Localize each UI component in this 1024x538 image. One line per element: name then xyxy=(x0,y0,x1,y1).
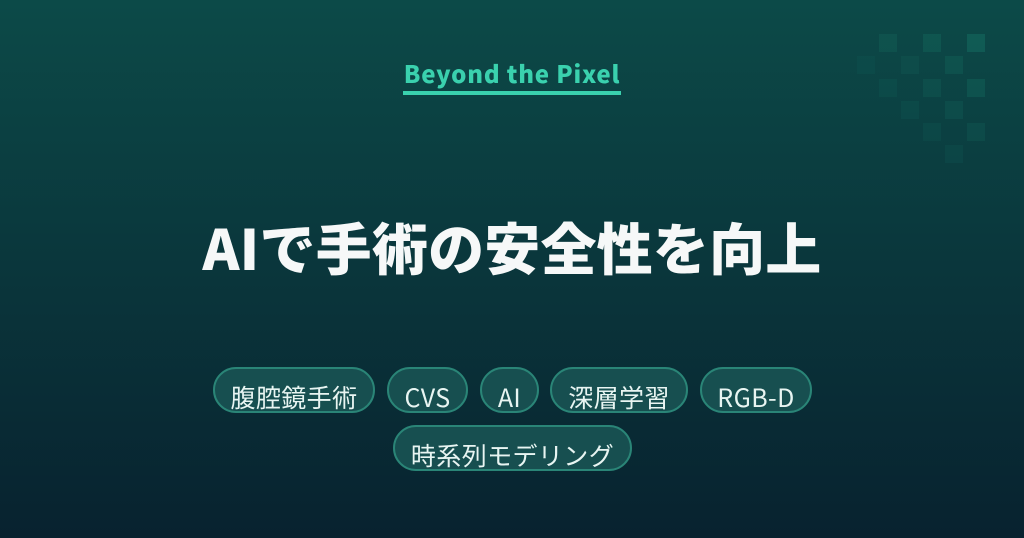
keyword tags xyxy=(213,367,812,472)
tag: AI xyxy=(480,367,539,413)
tag: deep learning xyxy=(550,367,688,413)
brand heading: Beyond the Pixel: Beyond the Pixel xyxy=(404,55,620,90)
tag: RGB-D xyxy=(700,367,812,413)
tag: AI: AI xyxy=(498,378,521,414)
tag: RGB-D: RGB-D xyxy=(717,378,795,414)
tag: laparoscopic surgery xyxy=(213,367,375,413)
tag: deep learning: 深層学習 xyxy=(568,378,670,414)
title: AIで手術の安全性を向上 xyxy=(203,206,821,287)
decorative pixel pattern xyxy=(879,34,985,141)
tag: time-series modeling: 時系列モデリング xyxy=(411,436,614,472)
tag: time-series modeling xyxy=(393,425,632,471)
tag: CVS xyxy=(387,367,468,413)
tag: laparoscopic surgery: 腹腔鏡手術 xyxy=(230,378,358,414)
tag: CVS: CVS xyxy=(404,378,451,414)
